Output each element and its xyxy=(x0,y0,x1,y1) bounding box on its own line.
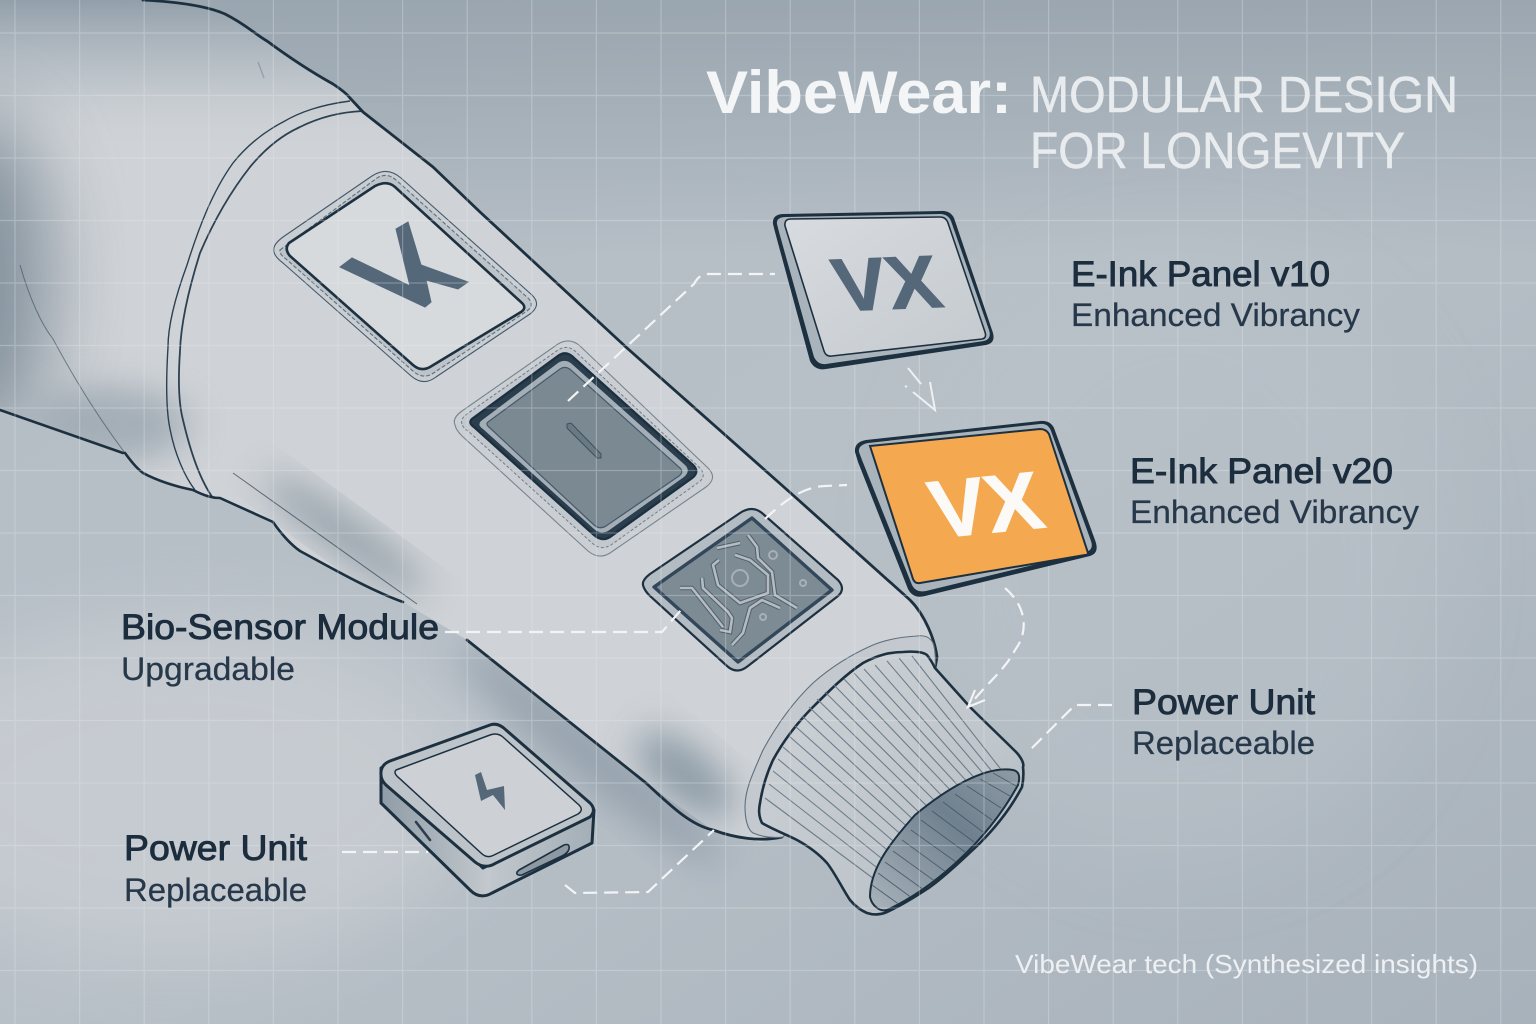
callout arrow: v20 to cuff xyxy=(968,588,1024,707)
label: Bio-Sensor Module xyxy=(121,608,439,687)
title xyxy=(706,59,1458,179)
V X label: VX xyxy=(825,240,949,327)
sleeve body xyxy=(0,0,937,842)
panel: dark display module on sleeve xyxy=(454,341,713,556)
label: Power Unit right: Replaceable xyxy=(1132,725,1315,761)
port xyxy=(517,844,569,875)
label: E-Ink Panel v20: Enhanced Vibrancy xyxy=(1130,494,1419,530)
label: Power Unit right: Power Unit xyxy=(1132,683,1315,722)
callout line: power unit left xyxy=(342,851,428,853)
panel: bio-sensor circuit module xyxy=(643,509,842,670)
footer source note: VibeWear tech (Synthesized insights) xyxy=(1015,949,1478,979)
callout line: module to sleeve xyxy=(565,830,714,893)
panel: E-Ink panel v10 module xyxy=(773,211,994,369)
label: Bio-Sensor Module: Upgradable xyxy=(121,651,295,687)
ribbing lines xyxy=(765,656,1003,879)
panel: E-Ink panel v20 orange module xyxy=(855,421,1097,597)
seam at shoulder xyxy=(20,62,417,604)
icon: circuit traces xyxy=(680,535,806,645)
panel: K logo patch on sleeve xyxy=(274,171,537,382)
label: Bio-Sensor Module: Bio-Sensor Module xyxy=(121,608,439,647)
arrow: v10 to v20 xyxy=(905,368,935,410)
icon: lightning bolt xyxy=(475,772,505,810)
callout line: module to v10 panel xyxy=(568,274,775,401)
icon: logo mark xyxy=(340,222,468,307)
cuff opening xyxy=(870,769,1019,910)
label: E-Ink Panel v10: Enhanced Vibrancy xyxy=(1071,297,1360,333)
label: E-Ink Panel v20: E-Ink Panel v20 xyxy=(1130,452,1393,491)
label: Power Unit left: Power Unit xyxy=(124,829,307,868)
title: VibeWear: xyxy=(706,59,1012,126)
V X label orange: VX xyxy=(921,456,1051,556)
label: Power Unit left xyxy=(124,829,307,908)
side port xyxy=(416,822,430,840)
panel: power unit module xyxy=(381,724,594,896)
label: Power Unit left: Replaceable xyxy=(124,872,307,908)
label: E-Ink Panel v10: E-Ink Panel v10 xyxy=(1071,255,1330,294)
label: Power Unit right xyxy=(1132,683,1315,761)
cuff xyxy=(745,636,1023,914)
label: E-Ink Panel v20 xyxy=(1130,452,1419,530)
icon: slot indicator xyxy=(567,423,601,458)
callout line: power unit right xyxy=(1030,705,1112,750)
callout line: bio-sensor label xyxy=(445,610,681,632)
title: MODULAR DESIGN xyxy=(1030,66,1458,123)
sleeve outlines xyxy=(0,0,937,839)
title: FOR LONGEVITY xyxy=(1030,122,1405,179)
callout line: circuit to v20 panel xyxy=(765,485,847,519)
label: E-Ink Panel v10 xyxy=(1071,255,1360,333)
